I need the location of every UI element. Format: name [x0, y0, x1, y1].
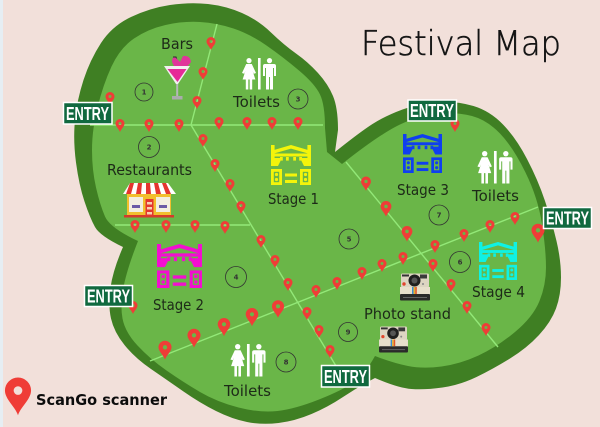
icon: cocktail — [164, 56, 191, 100]
entry sign west: ENTRY — [66, 104, 109, 124]
zone numbers: 8 — [284, 358, 289, 366]
paths — [90, 24, 538, 366]
legend label: ScanGo scanner — [36, 391, 168, 409]
icon: camera lower — [379, 326, 408, 353]
entry sign west — [64, 102, 112, 124]
icon: stage 2 — [157, 244, 202, 288]
ground border — [74, 3, 561, 424]
legend — [5, 378, 168, 415]
icon: camera upper — [400, 274, 430, 300]
icon: legend pin — [5, 378, 31, 415]
ground fill — [92, 22, 546, 412]
zone numbers: 3 — [296, 96, 301, 104]
label: toilets south: Toilets — [223, 382, 271, 400]
scanner pins — [106, 37, 545, 360]
zone numbers: 2 — [147, 144, 152, 152]
label: photo stand: Photo stand — [364, 305, 451, 323]
icon: toilets east — [477, 151, 513, 183]
labels — [107, 35, 525, 400]
label: stage 4: Stage 4 — [472, 283, 525, 301]
title: Festival Map — [361, 24, 561, 64]
icon: restaurant — [123, 183, 176, 218]
zone numbers: 7 — [437, 212, 442, 220]
icon: toilets south — [230, 344, 266, 376]
label: stage 1: Stage 1 — [268, 190, 319, 208]
zone numbers: 5 — [347, 236, 352, 244]
entry sign south: ENTRY — [324, 367, 367, 387]
label: stage 3: Stage 3 — [397, 181, 449, 199]
entry sign south — [322, 366, 370, 387]
zone numbers: 4 — [234, 274, 239, 282]
icon: stage 1 — [271, 145, 311, 185]
zone numbers: 6 — [458, 258, 463, 266]
entry sign southwest — [84, 286, 132, 306]
icon: stage 3 — [403, 134, 442, 173]
zone numbers: 1 — [142, 88, 147, 96]
label: toilets north: Toilets — [232, 93, 280, 111]
zone numbers: 9 — [346, 328, 351, 336]
zone numbers — [135, 83, 470, 372]
icon: stage 4 — [479, 242, 517, 280]
label: stage 2: Stage 2 — [153, 296, 204, 314]
label: toilets east: Toilets — [471, 187, 519, 205]
icon: toilets north — [242, 58, 276, 90]
label: bars: Bars — [161, 35, 193, 53]
entry sign southwest: ENTRY — [87, 286, 130, 306]
label: restaurants: Restaurants — [107, 161, 192, 179]
map: festival grounds — [74, 3, 561, 424]
entry sign north: ENTRY — [410, 101, 454, 121]
